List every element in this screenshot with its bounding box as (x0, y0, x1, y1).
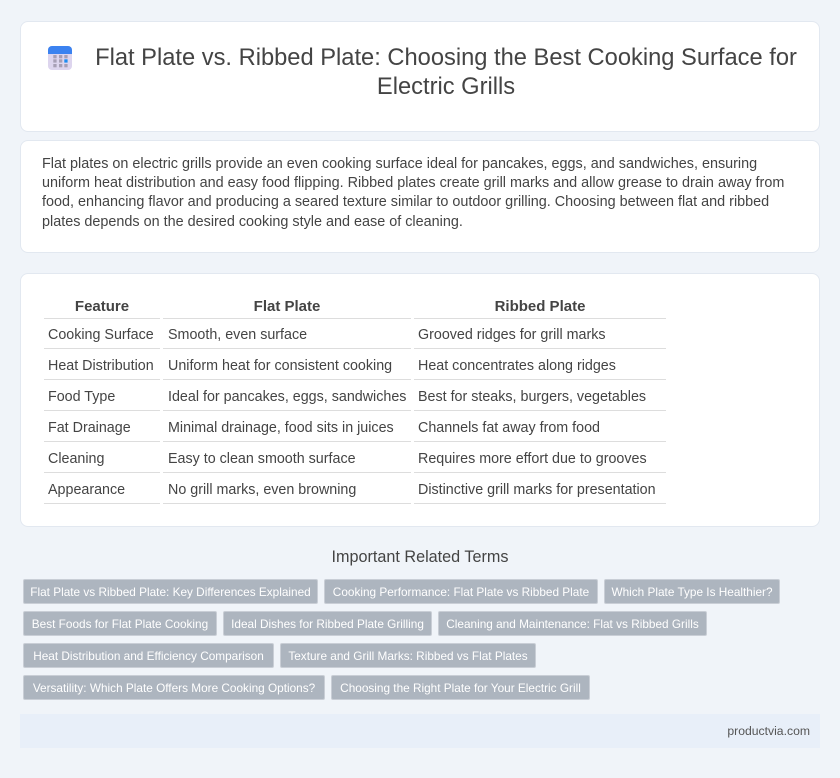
intro paragraph: food, enhancing flavor and producing a seared texture similar to outdoor grilling. Choosing between flat and ribbed (42, 194, 769, 210)
comparison table: Appearance (48, 482, 125, 498)
icon: calendar (48, 46, 72, 70)
comparison table: Smooth, even surface (168, 327, 307, 343)
title: Flat Plate vs. Ribbed Plate: Choosing the Best Cooking Surface for (95, 45, 797, 71)
comparison table: Flat Plate (254, 298, 320, 315)
comparison table: Ideal for pancakes, eggs, sandwiches (168, 389, 406, 405)
comparison table: Heat Distribution (48, 358, 154, 374)
intro paragraph: plates depends on the desired cooking style and ease of cleaning. (42, 214, 463, 230)
related term tags: Flat Plate vs Ribbed Plate: Key Differences Explained (30, 585, 311, 599)
related term tags: Cooking Performance: Flat Plate vs Ribbed Plate (333, 585, 589, 599)
related terms heading: Important Related Terms (332, 548, 508, 566)
header card (20, 21, 820, 132)
comparison table: Requires more effort due to grooves (418, 451, 647, 467)
comparison table: Channels fat away from food (418, 420, 600, 436)
comparison table: No grill marks, even browning (168, 482, 356, 498)
comparison table: Best for steaks, burgers, vegetables (418, 389, 646, 405)
related term tags: Cleaning and Maintenance: Flat vs Ribbed Grills (446, 617, 699, 631)
related term tags: Heat Distribution and Efficiency Comparison (33, 649, 264, 663)
comparison table: Ribbed Plate (495, 298, 585, 315)
intro paragraph: Flat plates on electric grills provide an even cooking surface ideal for pancakes, eggs, and sandwiches, ensuring (42, 156, 757, 172)
intro paragraph (42, 156, 784, 230)
comparison table: Cooking Surface (48, 327, 154, 343)
footer bar (20, 714, 820, 748)
comparison table (44, 298, 666, 504)
comparison table: Distinctive grill marks for presentation (418, 482, 656, 498)
related term tags (23, 579, 780, 700)
comparison table: Food Type (48, 389, 115, 405)
title: Electric Grills (377, 74, 515, 100)
related term tags: Versatility: Which Plate Offers More Cooking Options? (33, 681, 315, 695)
comparison table: Heat concentrates along ridges (418, 358, 616, 374)
comparison table: Minimal drainage, food sits in juices (168, 420, 394, 436)
comparison table: Uniform heat for consistent cooking (168, 358, 392, 374)
comparison table: Easy to clean smooth surface (168, 451, 356, 467)
related term tags: Choosing the Right Plate for Your Electric Grill (340, 681, 581, 695)
panel: comparison table (20, 273, 820, 527)
comparison table: Cleaning (48, 451, 104, 467)
related term tags: Best Foods for Flat Plate Cooking (32, 617, 208, 631)
comparison table: Grooved ridges for grill marks (418, 327, 606, 343)
panel: intro text (20, 140, 820, 253)
related term tags: Ideal Dishes for Ribbed Plate Grilling (231, 617, 424, 631)
related term tags: Which Plate Type Is Healthier? (611, 585, 773, 599)
intro paragraph: uniform heat distribution and easy food flipping. Ribbed plates create grill marks and allow grease to drain away from (42, 175, 784, 191)
footer source: productvia.com (727, 724, 810, 738)
title (95, 45, 797, 100)
related term tags: Texture and Grill Marks: Ribbed vs Flat Plates (288, 649, 528, 663)
comparison table: Fat Drainage (48, 420, 131, 436)
comparison table: Feature (75, 298, 129, 315)
